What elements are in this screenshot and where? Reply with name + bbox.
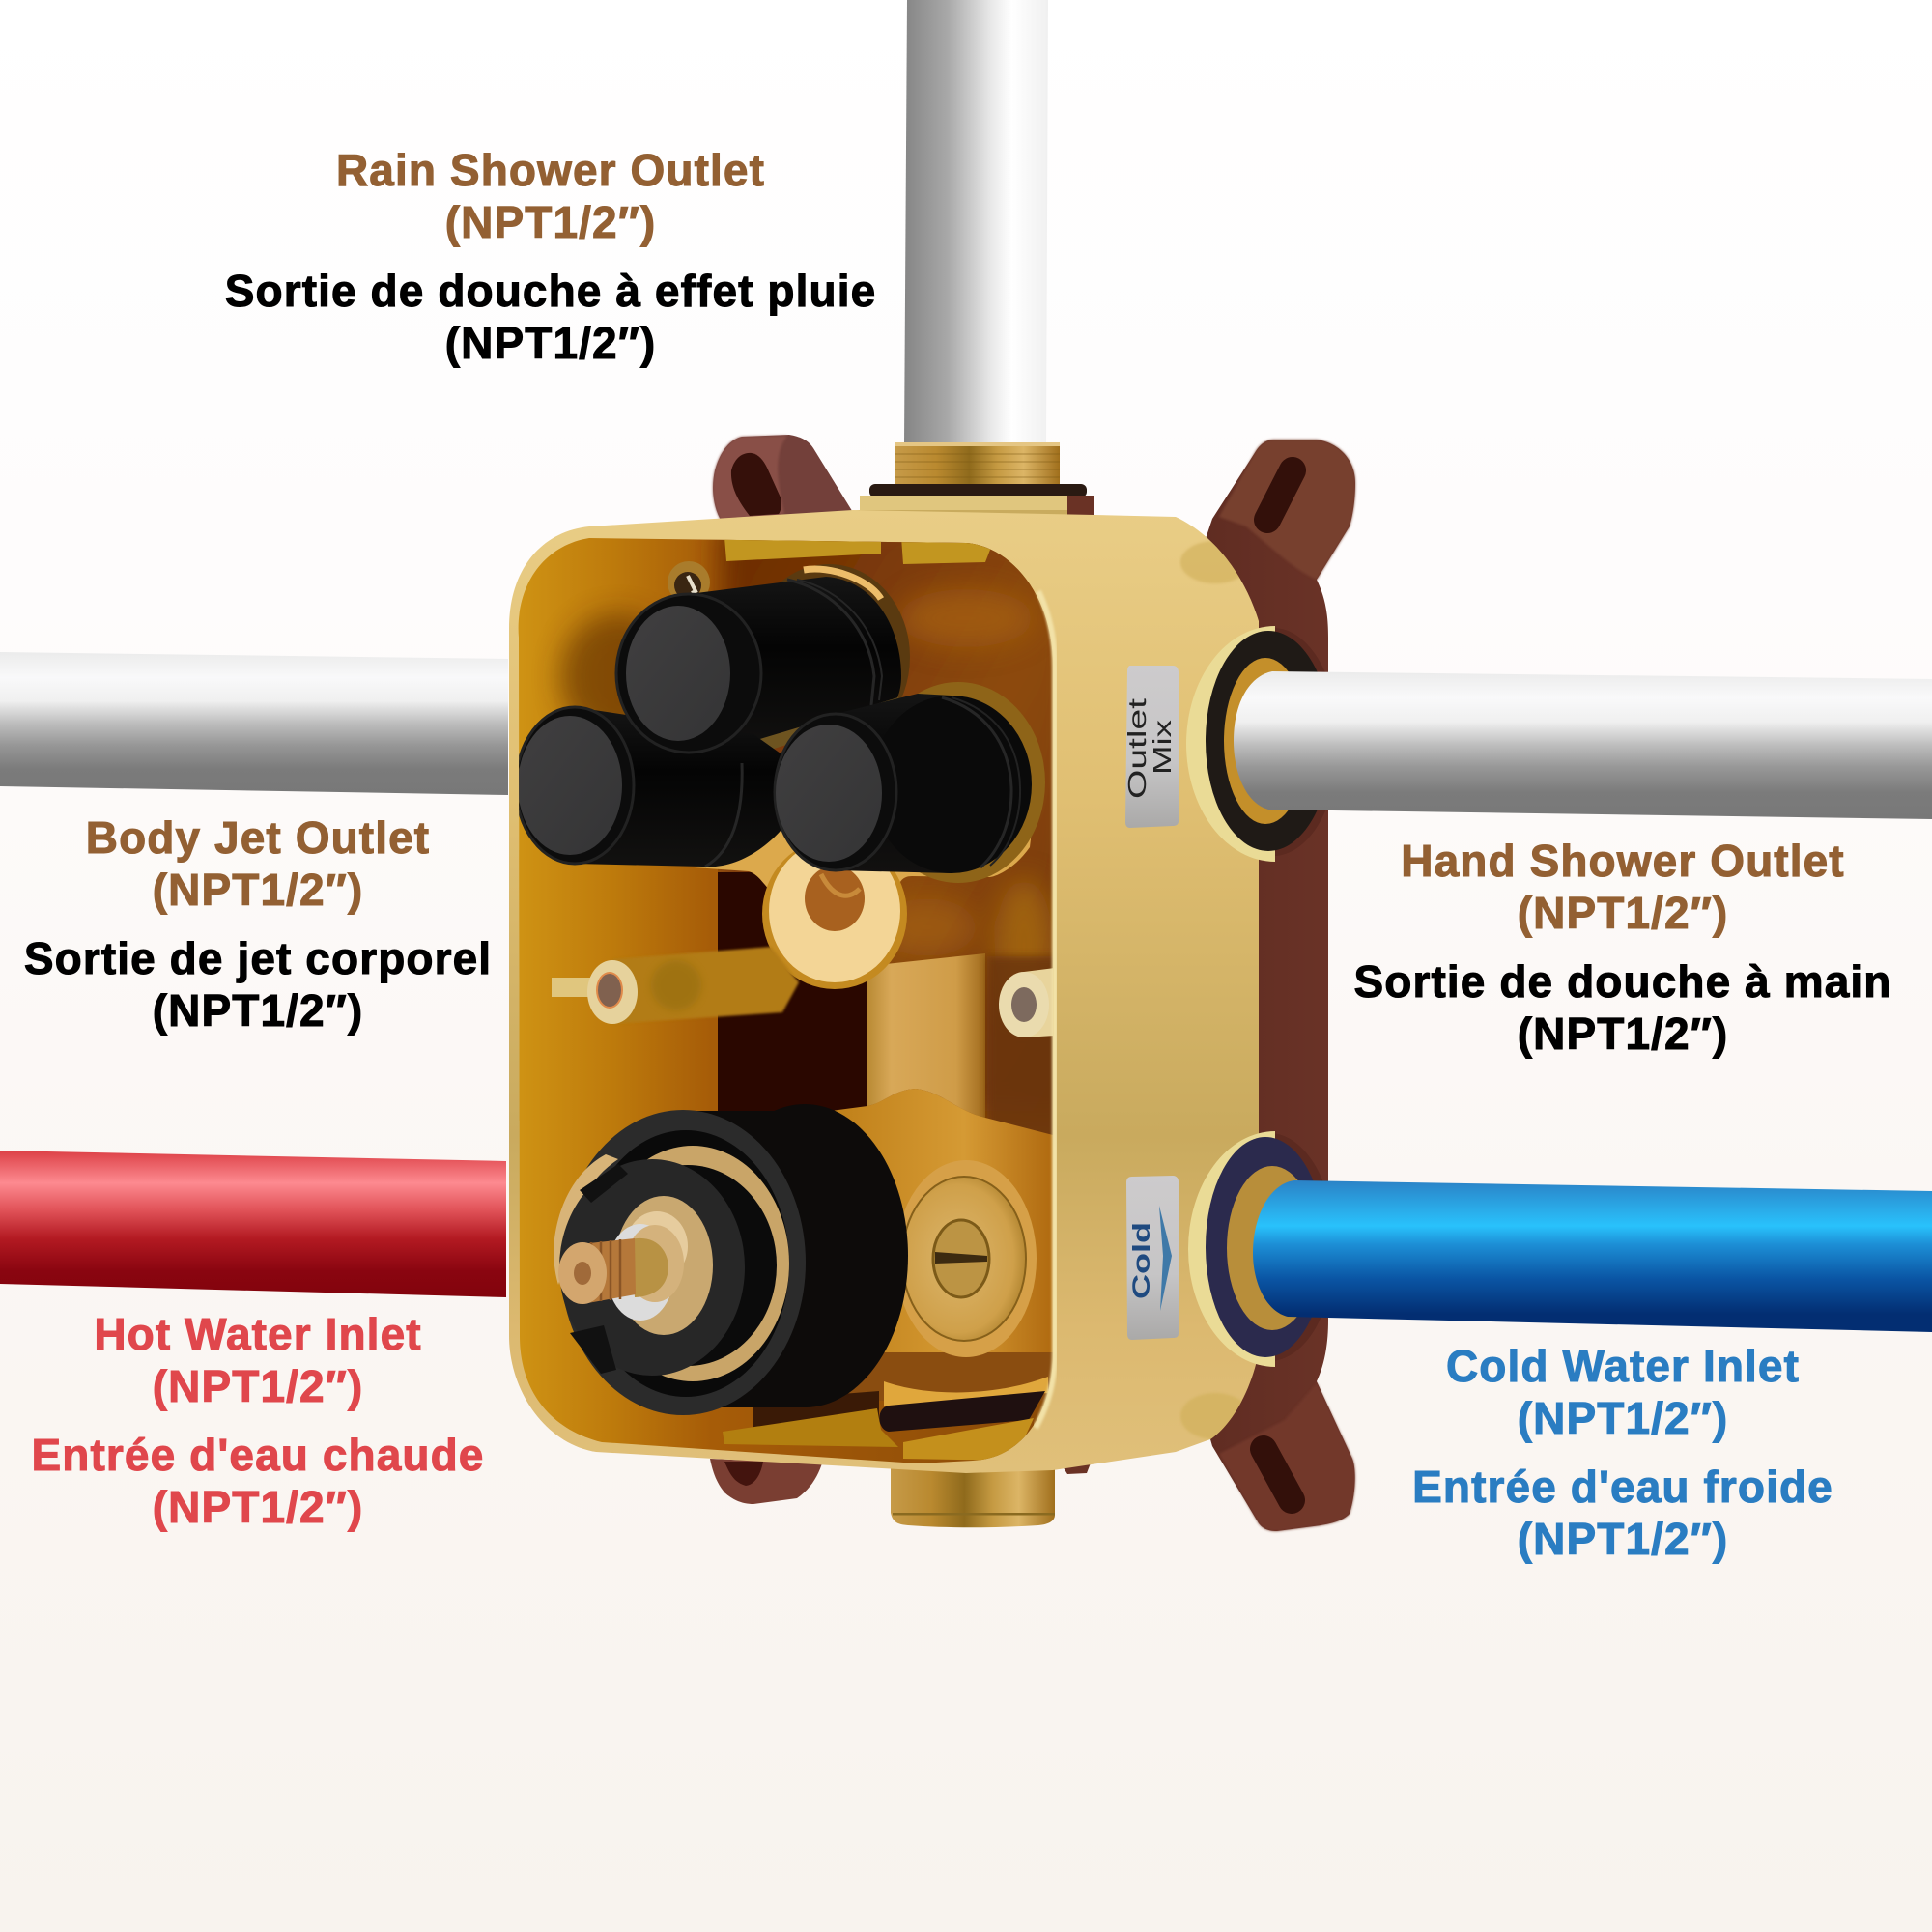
top tab right	[901, 542, 991, 564]
callout: body jet outlet	[24, 812, 492, 1036]
bottom tab right	[903, 1418, 1034, 1461]
screw	[668, 561, 710, 604]
brown mounting plate with ears	[710, 435, 1355, 1531]
housing interior	[512, 522, 1072, 1468]
pipe: rain shower outlet	[904, 0, 1048, 444]
knob top rear	[697, 564, 910, 739]
eyelet	[762, 838, 907, 989]
french label: Entrée d'eau chaude	[32, 1430, 484, 1480]
upper brass body	[720, 522, 1072, 1111]
english size: (NPT1/2″)	[153, 1361, 363, 1411]
shadow behind knobs	[546, 599, 647, 715]
english size: (NPT1/2″)	[153, 865, 363, 915]
pipe: cold water inlet	[1253, 1180, 1932, 1332]
right standoff	[999, 968, 1055, 1037]
interior base wall	[512, 531, 1058, 1468]
column	[867, 953, 985, 1118]
left standoff	[552, 947, 799, 1024]
bright right rim	[1036, 591, 1055, 1428]
rubber gasket	[879, 1391, 1045, 1432]
fluted stem	[580, 1238, 636, 1304]
knob top front	[616, 594, 761, 753]
pipe: hand shower outlet	[1234, 671, 1932, 819]
pipe: body jet outlet	[0, 652, 508, 795]
port ring: cold water	[1188, 1131, 1322, 1367]
cartridge	[554, 1104, 908, 1415]
ear bottom left	[710, 1459, 822, 1504]
bronze strip between knobs	[760, 697, 898, 749]
english label: Body Jet Outlet	[86, 812, 430, 863]
under plug band	[831, 1352, 1058, 1401]
english size: (NPT1/2″)	[1518, 888, 1728, 938]
ear bottom right highlight	[1219, 1383, 1355, 1531]
brass plug	[895, 1160, 1037, 1357]
knob right front	[775, 714, 896, 870]
label plate: outlet mix: Mix	[1148, 720, 1177, 775]
bottom tab left	[723, 1408, 898, 1447]
left brass crescent	[554, 1154, 618, 1285]
bottom threaded fitting	[891, 1459, 1092, 1527]
face shadow blotches	[1180, 541, 1242, 1439]
label plate: cold	[1126, 1176, 1179, 1340]
ear top left	[713, 435, 854, 522]
label plate: outlet mix: Outlet	[1122, 697, 1151, 799]
lower body	[831, 1089, 1053, 1362]
french size: (NPT1/2″)	[1518, 1009, 1728, 1059]
ear top left front	[713, 436, 787, 522]
ear top right highlight	[1219, 440, 1355, 580]
arrow	[1159, 1206, 1172, 1311]
english size: (NPT1/2″)	[445, 197, 656, 247]
amber left wall	[512, 850, 718, 1121]
french label: Sortie de douche à main	[1354, 956, 1891, 1007]
french size: (NPT1/2″)	[1518, 1514, 1728, 1564]
english label: Rain Shower Outlet	[336, 145, 765, 195]
floor shadow	[753, 1391, 879, 1430]
english label: Hot Water Inlet	[94, 1309, 422, 1359]
brass hub	[614, 1196, 713, 1335]
ear slot bottom right	[1264, 1449, 1292, 1500]
valve	[509, 435, 1364, 1531]
french label: Entrée d'eau froide	[1412, 1462, 1833, 1512]
english size: (NPT1/2″)	[1518, 1393, 1728, 1443]
french label: Sortie de douche à effet pluie	[225, 266, 876, 316]
callout: hot water inlet	[32, 1309, 484, 1532]
ear slot bottom left	[724, 1462, 763, 1486]
label plate: cold: Cold	[1128, 1222, 1155, 1299]
gold flange below knobs	[694, 831, 1032, 894]
french size: (NPT1/2″)	[153, 1482, 363, 1532]
port ring: hand shower	[1186, 626, 1325, 862]
french size: (NPT1/2″)	[153, 985, 363, 1036]
callout: rain shower outlet	[225, 145, 876, 368]
top threaded fitting	[710, 442, 1094, 529]
housing shell	[509, 510, 1259, 1473]
ear slot top right	[1267, 470, 1293, 520]
dark rear cavity	[718, 872, 867, 1112]
english label: Cold Water Inlet	[1446, 1341, 1800, 1391]
french size: (NPT1/2″)	[445, 318, 656, 368]
label plate: outlet mix	[1122, 666, 1179, 828]
french label: Sortie de jet corporel	[24, 933, 492, 983]
top tab left	[724, 537, 881, 561]
right column shadow	[983, 952, 1053, 1134]
knob right rear	[836, 682, 1045, 883]
upper mottling	[898, 583, 1052, 960]
english label: Hand Shower Outlet	[1401, 836, 1845, 886]
pipe: hot water inlet	[0, 1151, 506, 1297]
callout: cold water inlet	[1412, 1341, 1833, 1564]
ear slot top left	[731, 453, 781, 516]
knob left	[516, 707, 781, 867]
callout: hand shower outlet	[1354, 836, 1891, 1059]
